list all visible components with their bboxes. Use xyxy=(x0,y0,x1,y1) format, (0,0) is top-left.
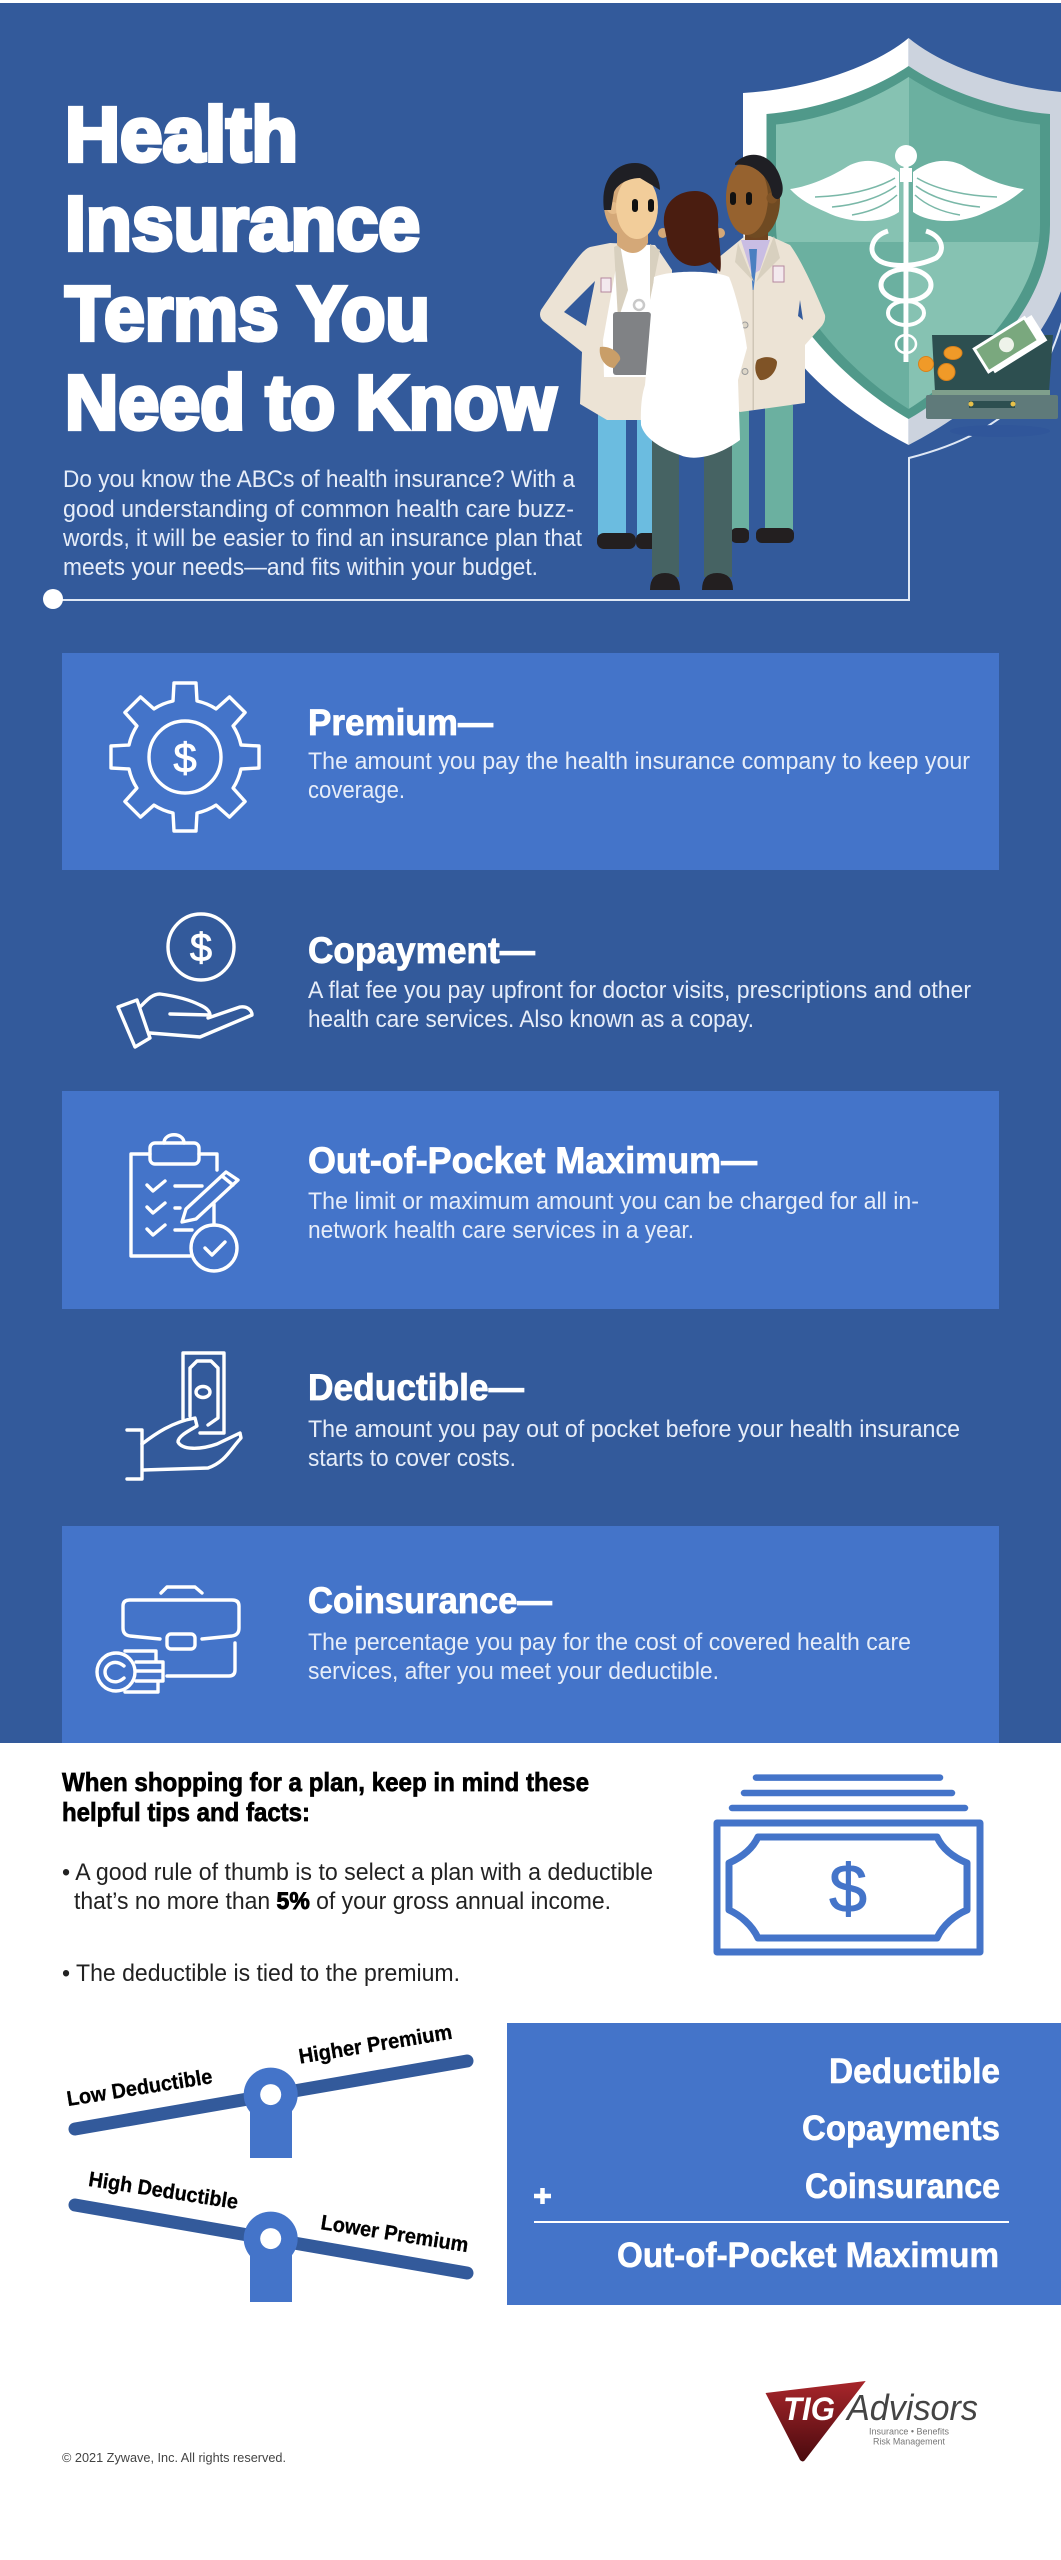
definition: copayment: health care services. Also known as a copay. xyxy=(308,1006,754,1033)
illustration: doctor on the right xyxy=(710,155,825,543)
icon: stack of bills xyxy=(717,1778,980,1952)
chart: low deductible / higher premium seesaw xyxy=(65,2021,467,2158)
definition: premium: The amount you pay the health insurance company to keep your xyxy=(308,748,970,775)
definition: deductible: The amount you pay out of pocket before your health insurance xyxy=(308,1416,960,1443)
definition: deductible xyxy=(308,1416,960,1472)
sum item: deductible: Deductible xyxy=(829,2052,1000,2091)
logo: TIG Advisors: TIG xyxy=(783,2391,835,2427)
title xyxy=(65,92,557,446)
heading: premium: Premium— xyxy=(308,702,493,743)
label: low deductible: Low Deductible xyxy=(65,2065,214,2111)
icon: gear with dollar: $ xyxy=(173,734,197,781)
sum item: copayments: Copayments xyxy=(802,2109,1000,2148)
icon: briefcase with coins xyxy=(97,1587,239,1692)
panel: out-of-pocket sum xyxy=(507,2023,1061,2305)
illustration: doctor on the left xyxy=(540,163,672,549)
definition: coinsurance: services, after you meet your deductible. xyxy=(308,1658,719,1685)
intro text: good understanding of common health care buzz- xyxy=(63,496,574,523)
sum item: coinsurance: Coinsurance xyxy=(805,2167,1000,2206)
icon: hand with coin: $ xyxy=(190,926,212,970)
panel: copayment xyxy=(118,914,971,1047)
definition: out-of-pocket maximum xyxy=(308,1188,919,1244)
title: Terms You xyxy=(65,271,430,357)
tips heading: When shopping for a plan, keep in mind these xyxy=(62,1767,589,1797)
logo: TIG Advisors: Insurance • Benefits xyxy=(869,2426,949,2436)
illustration: briefcase with money xyxy=(918,312,1058,437)
label: higher premium: Higher Premium xyxy=(297,2021,454,2069)
intro text xyxy=(62,466,582,581)
tips heading: helpful tips and facts: xyxy=(62,1797,310,1827)
icon: caduceus xyxy=(790,145,1024,362)
sum total: out-of-pocket maximum: Out-of-Pocket Maximum xyxy=(617,2236,999,2275)
definition: copayment: A flat fee you pay upfront for doctor visits, prescriptions and other xyxy=(308,977,971,1004)
illustration: shield with caduceus xyxy=(743,38,1061,445)
icon: hand with coin xyxy=(118,914,252,1047)
icon: banknotes xyxy=(972,312,1047,376)
definition: coinsurance: The percentage you pay for the cost of covered health care xyxy=(308,1629,911,1656)
connector line xyxy=(43,322,1061,609)
tip: rule of thumb: • A good rule of thumb is to select a plan with a deductible xyxy=(62,1859,653,1886)
intro text: Do you know the ABCs of health insurance? With a xyxy=(63,466,576,493)
logo: TIG Advisors: Risk Management xyxy=(873,2436,945,2446)
logo: TIG Advisors xyxy=(766,2381,978,2462)
definition: out-of-pocket maximum: network health care services in a year. xyxy=(308,1217,694,1244)
panel: deductible xyxy=(127,1353,960,1479)
title: Health xyxy=(65,92,298,178)
background: dark blue header and terms area xyxy=(0,3,1061,1743)
definition: out-of-pocket maximum: The limit or maximum amount you can be charged for all in- xyxy=(308,1188,919,1215)
icon: coins xyxy=(918,346,962,380)
label: lower premium: Lower Premium xyxy=(319,2211,470,2257)
intro text: meets your needs—and fits within your budget. xyxy=(63,554,538,581)
icon: clipboard checklist xyxy=(131,1135,238,1271)
definition: copayment xyxy=(308,977,971,1033)
heading: out-of-pocket maximum: Out-of-Pocket Maximum— xyxy=(308,1140,757,1181)
icon: gear with dollar xyxy=(111,683,259,831)
tip: rule of thumb: that’s no more than 5% of your gross annual income. xyxy=(74,1888,611,1915)
label: high deductible: High Deductible xyxy=(87,2168,240,2214)
heading: copayment: Copayment— xyxy=(308,930,535,971)
plus sign xyxy=(534,2188,551,2204)
definition: premium: coverage. xyxy=(308,777,405,804)
icon: hand holding banknote xyxy=(127,1353,241,1479)
chart: high deductible / lower premium seesaw xyxy=(75,2168,470,2302)
intro text: words, it will be easier to find an insurance plan that xyxy=(62,525,582,552)
tips heading xyxy=(62,1767,589,1827)
icon: stack of bills: $ xyxy=(829,1851,867,1927)
tip: rule of thumb xyxy=(62,1859,653,1915)
logo: TIG Advisors: Advisors xyxy=(845,2387,978,2428)
title: Need to Know xyxy=(65,360,557,446)
definition: premium xyxy=(308,748,970,804)
panel: out-of-pocket maximum xyxy=(62,1091,999,1309)
heading: deductible: Deductible— xyxy=(308,1367,524,1408)
definition: coinsurance xyxy=(308,1629,911,1685)
heading: coinsurance: Coinsurance— xyxy=(308,1580,552,1621)
tip: deductible tied to premium: • The deductible is tied to the premium. xyxy=(62,1960,460,1987)
panel: premium xyxy=(62,653,999,870)
illustration: doctor from behind, centre xyxy=(641,191,747,590)
definition: deductible: starts to cover costs. xyxy=(308,1445,516,1472)
copyright: © 2021 Zywave, Inc. All rights reserved. xyxy=(62,2450,286,2465)
title: Insurance xyxy=(65,181,420,267)
panel: coinsurance xyxy=(62,1526,999,1743)
